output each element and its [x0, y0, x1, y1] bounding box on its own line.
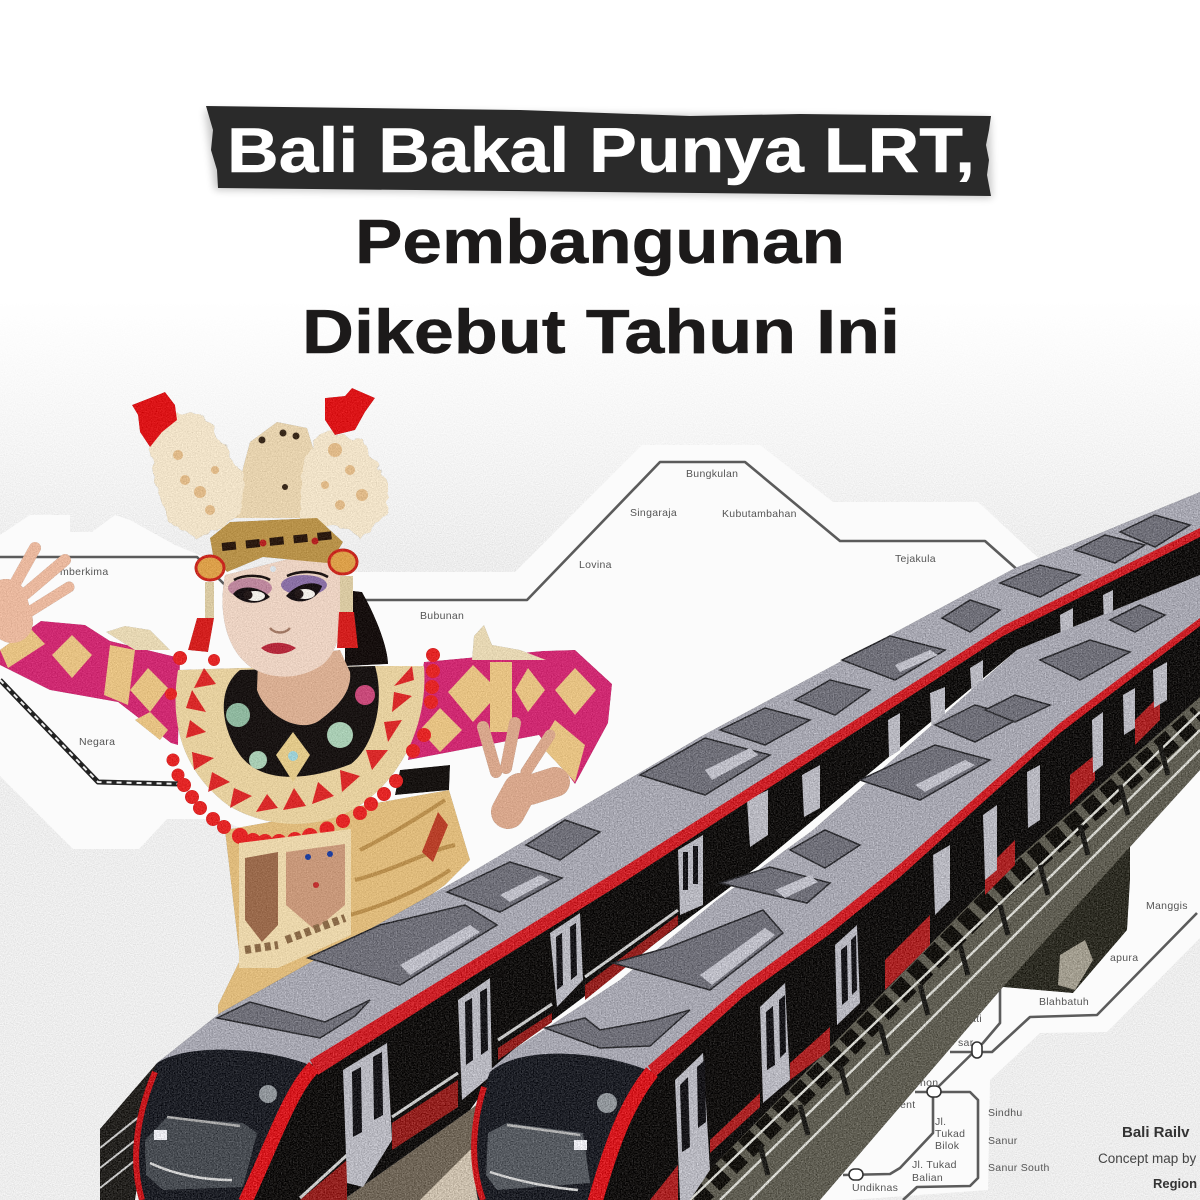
left railing	[100, 1112, 145, 1188]
station labels: Singaraja	[630, 507, 677, 519]
viaduct pillar	[960, 800, 1130, 993]
flower horn right	[300, 430, 388, 538]
bright ballast	[420, 1150, 485, 1200]
title line 2: Pembangunan	[355, 208, 845, 277]
viaduct dark window band	[695, 715, 1200, 1200]
station labels: Bungkulan	[686, 468, 738, 480]
branch line	[938, 985, 1000, 1087]
apron pattern	[245, 844, 345, 950]
train B roof unit highlights	[700, 760, 975, 985]
necklace ornaments	[226, 685, 375, 782]
train B red nose frame	[595, 1072, 652, 1200]
collar red pompoms	[165, 648, 440, 850]
train B roof	[490, 575, 1200, 1072]
far rail at left	[100, 1063, 157, 1200]
train B door windows	[680, 935, 857, 1152]
train B red stripe	[648, 618, 1200, 1077]
crown dome	[230, 422, 317, 518]
station labels: Sanur South	[988, 1162, 1050, 1174]
left shoulder ornament	[106, 626, 170, 650]
gravel between the trains	[343, 1090, 495, 1200]
viaduct deck	[660, 690, 1200, 1200]
title line 1: Bali Bakal Punya LRT,	[227, 116, 975, 186]
pillar block	[1058, 940, 1093, 990]
station labels: Lovina	[579, 559, 612, 571]
train A door windows	[352, 846, 698, 1137]
station labels: Tejakula	[895, 553, 936, 565]
train A red nose frame	[245, 1067, 314, 1200]
face makeup	[228, 566, 328, 654]
right hand	[483, 723, 555, 812]
train A side	[250, 530, 1200, 1200]
south loop line	[903, 1092, 978, 1200]
face	[222, 556, 343, 677]
train B lower red panels	[650, 695, 1160, 1200]
right shoulder ornament	[472, 625, 546, 660]
station labels: Manggis	[1146, 900, 1188, 912]
crown band jewels	[222, 535, 335, 547]
map legend: Region	[1153, 1176, 1197, 1191]
north rail line	[0, 462, 1020, 600]
station labels: Blahbatuh	[1039, 996, 1089, 1008]
train B windscreen	[486, 1123, 590, 1190]
hair behind head	[345, 590, 388, 666]
east rail line	[950, 913, 1197, 1052]
station labels: sar	[958, 1037, 974, 1049]
station labels: ati	[970, 1013, 982, 1025]
train B side	[593, 620, 1200, 1200]
train B headlight	[597, 1093, 617, 1113]
train A roof	[157, 492, 1200, 1065]
title tape shadow	[205, 110, 992, 198]
train A nose	[137, 1050, 312, 1200]
station labels: Jl. Tukad	[912, 1159, 957, 1171]
station labels: mberkima	[60, 566, 108, 578]
train A windscreen	[145, 1117, 257, 1190]
station labels: Tukad	[935, 1128, 965, 1140]
flower texture	[173, 443, 368, 515]
earring discs	[196, 550, 357, 580]
viaduct and trains	[100, 492, 1200, 1200]
right arm sleeve	[408, 650, 612, 784]
collar black inner	[224, 666, 379, 777]
collar	[176, 666, 424, 824]
left arm sleeve	[0, 621, 180, 745]
left hand	[6, 548, 69, 622]
station labels: Bilok	[935, 1140, 960, 1152]
ear tassels	[188, 576, 358, 652]
south branch line	[843, 1097, 933, 1175]
right arm pattern	[420, 662, 596, 782]
station labels: Negara	[79, 736, 115, 748]
train B nose	[474, 1054, 652, 1200]
station labels: apura	[1110, 952, 1138, 964]
map: Bali rail concept map	[0, 445, 1200, 1200]
station labels: Bubunan	[420, 610, 464, 622]
train A lower red bands	[300, 915, 678, 1200]
title line 3: Dikebut Tahun Ini	[302, 298, 900, 367]
viaduct dark posts	[760, 745, 1168, 1175]
train B windscreen highlights	[490, 1125, 587, 1190]
station labels: ent	[900, 1099, 916, 1111]
station labels: non	[920, 1077, 938, 1089]
train A headlight	[259, 1085, 277, 1103]
torso skirt	[218, 790, 470, 1045]
train A doors	[343, 590, 1113, 1187]
map legend	[1098, 1124, 1197, 1191]
train B roof units	[545, 605, 1165, 1048]
collar red triangles	[186, 666, 414, 812]
skirt red motif	[422, 812, 448, 862]
red flower left	[132, 392, 177, 447]
train A red stripe	[310, 528, 1200, 1075]
land mass	[0, 445, 1200, 1200]
belt	[395, 765, 450, 795]
west rail line	[0, 680, 180, 784]
apron panels	[239, 829, 351, 968]
train A light sill lines	[300, 910, 678, 1198]
left arm pattern	[0, 628, 168, 740]
map legend: Concept map by	[1098, 1151, 1197, 1166]
crown dome details	[258, 430, 309, 504]
station labels: Sanur	[988, 1135, 1018, 1147]
map legend: Bali Railv	[1122, 1124, 1190, 1141]
flower horn left	[148, 412, 245, 538]
crown band	[210, 518, 343, 572]
viaduct railing	[690, 712, 1200, 1200]
red flower right	[325, 388, 375, 435]
station labels: Undiknas	[852, 1182, 898, 1194]
train A windscreen highlights	[150, 1117, 240, 1180]
station labels: Jl.	[935, 1116, 946, 1128]
train A roof unit highlights	[400, 650, 938, 975]
neck	[257, 650, 350, 725]
stations	[849, 1042, 982, 1180]
train B doors	[675, 662, 1167, 1200]
station labels: Sindhu	[988, 1107, 1022, 1119]
dancer: Balinese Legong figure	[0, 388, 612, 1045]
station labels: Kubutambahan	[722, 508, 797, 520]
station labels: Balian	[912, 1172, 943, 1184]
title tape	[206, 106, 991, 196]
train A roof units	[217, 515, 1190, 1038]
station labels	[60, 468, 1188, 1194]
skirt folds	[350, 800, 455, 915]
